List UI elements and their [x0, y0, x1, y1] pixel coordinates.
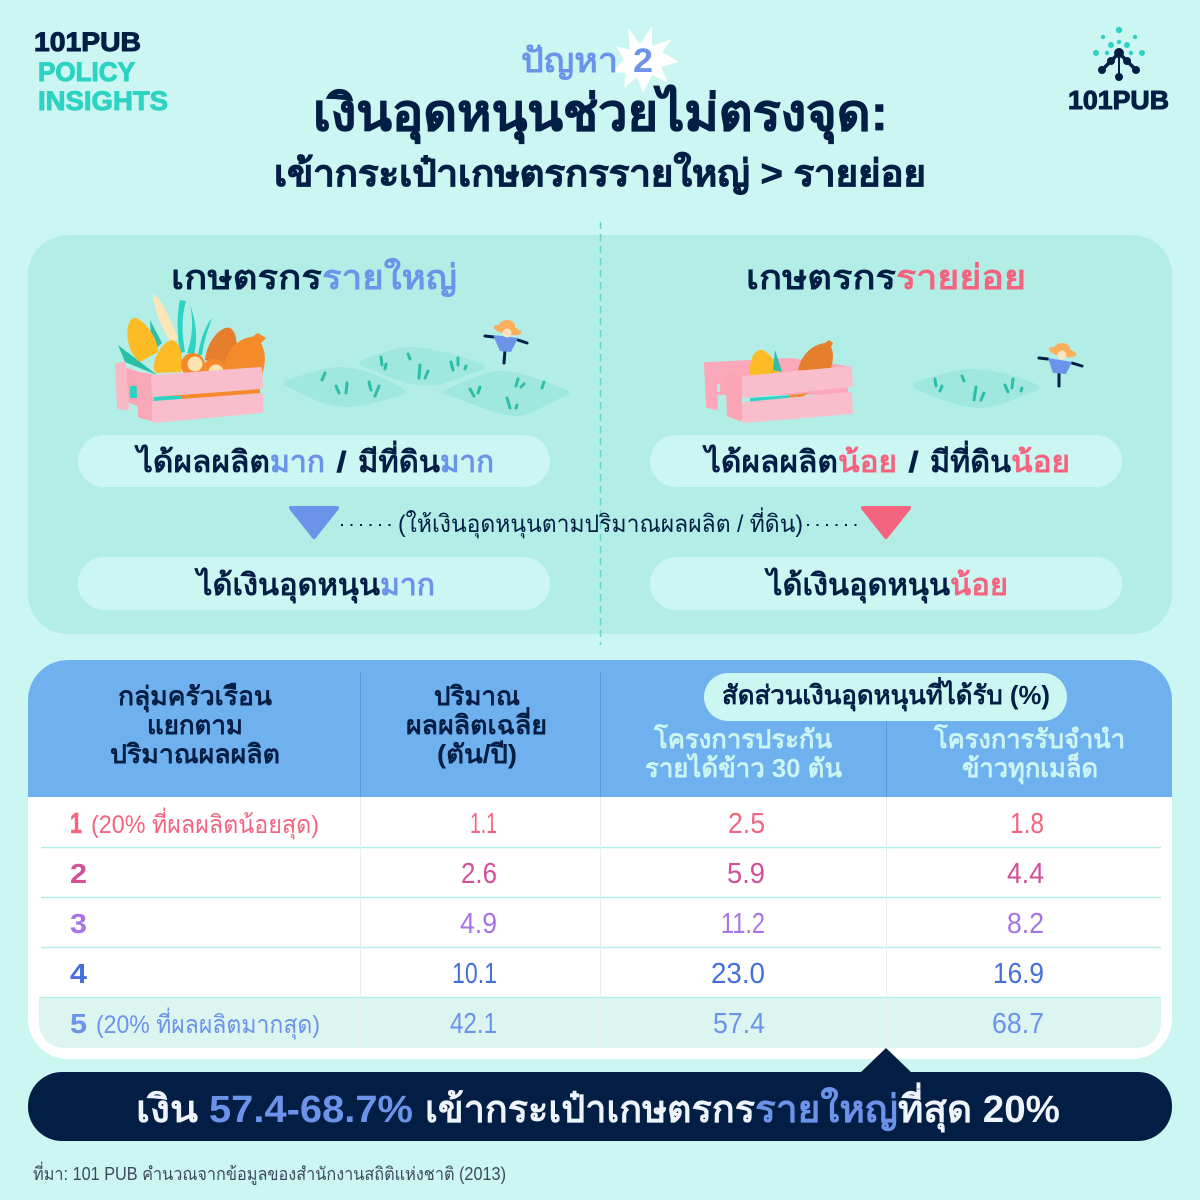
row 4	[70, 958, 1044, 990]
column header: rice income guarantee: โครงการประกัน	[653, 723, 832, 754]
row 5: 57.4	[713, 1008, 765, 1040]
heading: small farmers: เกษตรกร	[746, 259, 897, 297]
row 4: 16.9	[993, 958, 1044, 990]
row 4: 23.0	[711, 958, 765, 990]
column header: rice pledging	[933, 723, 1125, 785]
callout: key finding banner: 57.4-68.7%	[209, 1089, 413, 1131]
column header: rice pledging: ข้าวทุกเมล็ด	[962, 752, 1098, 785]
row 3: 3	[70, 908, 87, 939]
table: subsidy share by household group	[28, 660, 1172, 1059]
heading: problem number 2: ปัญหา	[521, 42, 618, 81]
column header: rice pledging: โครงการรับจำนำ	[933, 723, 1125, 754]
pill: large subsidy: ได้เงินอุดหนุน	[194, 567, 380, 604]
subtitle: เข้ากระเป๋าเกษตรกรรายใหญ่ > รายย่อย	[274, 151, 926, 195]
icon: single plot of land	[913, 369, 1040, 408]
icon: nearly empty crate	[706, 340, 851, 421]
row 3: 8.2	[1007, 908, 1044, 940]
column header: household group: ปริมาณผลผลิต	[110, 739, 280, 769]
column header: average yield: (ตัน/ปี)	[437, 739, 517, 769]
column header: household group	[110, 681, 280, 769]
column header: average yield	[406, 681, 547, 769]
logo: 101 PUB Policy Insights: 101PUB	[34, 27, 141, 57]
pill: small yield and land: ได้ผลผลิต	[702, 444, 838, 479]
row 5: 42.1	[450, 1008, 497, 1040]
column header: rice income guarantee	[645, 723, 842, 783]
heading: problem number 2	[521, 26, 679, 93]
callout: key finding banner	[28, 1048, 1172, 1141]
callout: key finding banner: เงิน	[136, 1089, 198, 1131]
column header: household group: แยกตาม	[147, 710, 243, 740]
logo: 101 PUB Policy Insights	[34, 27, 168, 116]
heading: problem number 2: 2	[633, 42, 653, 80]
pill: large subsidy: มาก	[380, 569, 435, 602]
row 3: 4.9	[460, 908, 497, 940]
heading: small farmers	[746, 259, 1026, 297]
row 1: (20% ที่ผลผลิตน้อยสุด)	[91, 807, 319, 840]
pill: small yield and land: น้อย	[1011, 446, 1070, 479]
callout: key finding banner: รายใหญ่	[755, 1087, 898, 1131]
heading: large farmers	[171, 257, 457, 298]
row 3	[70, 908, 1044, 940]
pill: large yield and land: มาก	[440, 446, 494, 479]
pill: large subsidy	[78, 557, 550, 610]
column header: average yield: ผลผลิตเฉลี่ย	[406, 706, 547, 740]
pill: small subsidy: ได้เงินอุดหนุน	[764, 567, 950, 604]
pill: large yield and land: ได้ผลผลิต	[134, 444, 270, 479]
pill: small subsidy: น้อย	[950, 569, 1008, 602]
column group header: subsidy share pill: สัดส่วนเงินอุดหนุนที่ได้รับ (%)	[722, 676, 1050, 712]
row 5: 68.7	[992, 1008, 1044, 1040]
pill: large yield and land	[78, 435, 550, 487]
row 2: 5.9	[727, 858, 765, 890]
row 1	[70, 807, 1044, 840]
pill: large yield and land: มีที่ดิน	[358, 440, 441, 479]
row 4: 4	[70, 958, 87, 989]
row 1: 1	[70, 808, 82, 840]
row 1: 2.5	[728, 808, 765, 840]
pill: small yield and land: น้อย	[838, 446, 897, 479]
icon: full crate of produce	[117, 294, 266, 421]
row 2: 4.4	[1007, 858, 1044, 890]
heading: small farmers: รายย่อย	[896, 259, 1026, 297]
pill: small yield and land: มีที่ดิน	[930, 440, 1011, 479]
row 1: 1.1	[470, 808, 497, 840]
column header: household group: กลุ่มครัวเรือน	[118, 681, 272, 713]
row 3: 11.2	[721, 908, 765, 940]
row 5: 5	[70, 1008, 87, 1039]
logo: 101 PUB network icon: 101PUB	[1068, 85, 1169, 115]
pill: large yield and land: /	[336, 446, 348, 479]
row 2: 2	[70, 858, 87, 889]
pill: small yield and land: /	[908, 446, 920, 479]
pill: large yield and land: มาก	[270, 446, 325, 479]
row 1: 1.8	[1010, 808, 1044, 840]
pill: small subsidy	[650, 557, 1122, 610]
callout: key finding banner: เข้ากระเป๋าเกษตรกร	[425, 1089, 756, 1131]
source note: ที่มา: 101 PUB คำนวณจากข้อมูลของสำนักงานสถิติแห่งชาติ (2013)	[33, 1161, 506, 1185]
row 2	[70, 858, 1044, 890]
title: เงินอุดหนุนช่วยไม่ตรงจุด:	[313, 84, 888, 144]
heading: large farmers: รายใหญ่	[322, 257, 457, 298]
heading: large farmers: เกษตรกร	[171, 259, 323, 297]
arrow: blue down triangle	[291, 508, 337, 537]
condition note: (ให้เงินอุดหนุนตามปริมาณผลผลิต / ที่ดิน)	[398, 507, 803, 539]
pill: small yield and land	[650, 435, 1122, 487]
panel: large vs small farmers	[28, 222, 1172, 645]
row 5	[70, 1007, 1044, 1040]
logo: 101 PUB Policy Insights: POLICY	[38, 57, 135, 87]
icon: scarecrow left	[485, 320, 527, 363]
logo: 101 PUB Policy Insights: INSIGHTS	[38, 86, 168, 116]
logo: 101 PUB network icon	[1068, 27, 1169, 115]
row 2: 2.6	[461, 858, 497, 890]
column group header: subsidy share pill	[704, 673, 1067, 721]
arrow: red down triangle	[863, 508, 909, 537]
row 4: 10.1	[452, 958, 497, 990]
callout: key finding banner: ที่สุด 20%	[898, 1082, 1060, 1133]
column header: average yield: ปริมาณ	[434, 681, 520, 711]
column header: rice income guarantee: รายได้ข้าว 30 ตัน	[645, 752, 842, 783]
row 5: (20% ที่ผลผลิตมากสุด)	[96, 1007, 320, 1040]
icon: three plots of land	[284, 347, 570, 416]
icon: scarecrow right	[1039, 343, 1082, 386]
